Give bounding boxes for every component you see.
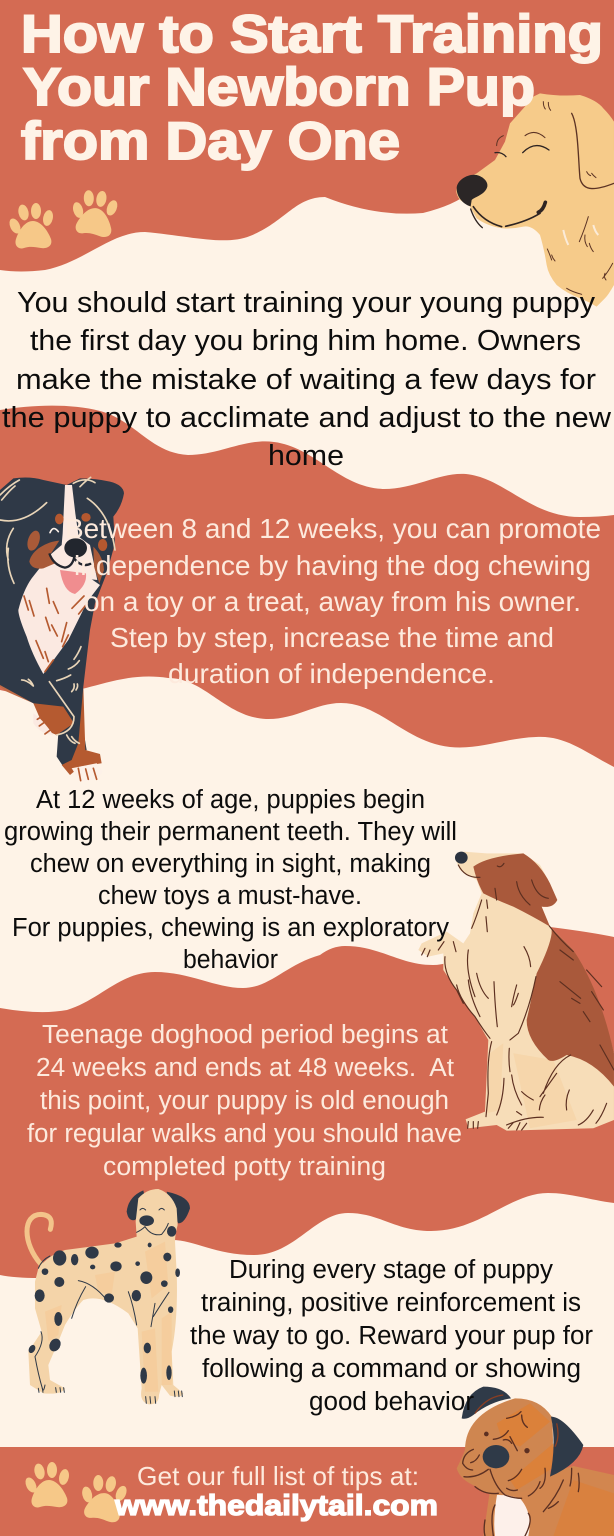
text block: 12 weeks: chew on everything in sight, making [30, 850, 431, 878]
text block: teenage doghood: for regular walks and you should have [27, 1120, 462, 1148]
panel: third wave band [0, 927, 614, 1278]
text block: 12 weeks [4, 786, 457, 974]
text block: teenage doghood: 24 weeks and ends at 48 weeks. At [36, 1054, 454, 1082]
heading: title: from Day One [21, 112, 400, 171]
text block: teenage doghood: Teenage doghood period begins at [42, 1021, 448, 1049]
text block: teenage doghood: this point, your puppy is old enough [40, 1087, 449, 1115]
text block: positive reinforcement: good behavior [309, 1388, 475, 1416]
text block: positive reinforcement: following a command or showing [202, 1355, 581, 1383]
illustration: golden retriever [456, 93, 614, 307]
text block: positive reinforcement: During every stage of puppy [229, 1256, 553, 1284]
text block: intro: the first day you bring him home. Owners [30, 325, 581, 357]
icon: paw print top left [7, 203, 54, 248]
text block: 12 weeks: For puppies, chewing is an exploratory [12, 914, 449, 942]
text block: 8 to 12 weeks [65, 513, 601, 689]
footer text: website: www.thedailytail.com [114, 1490, 438, 1522]
text block: intro: make the mistake of waiting a few days for [16, 364, 596, 396]
illustration: boxer puppy [457, 1387, 614, 1536]
text block: 8 to 12 weeks: independence by having the dog chewing [74, 550, 591, 581]
text block: 8 to 12 weeks: duration of independence. [168, 658, 495, 689]
illustration: collie dog [418, 852, 614, 1131]
illustration: dalmatian dog [27, 1189, 190, 1404]
text block: 8 to 12 weeks: Step by step, increase the time and [110, 622, 554, 653]
text block: 12 weeks: At 12 weeks of age, puppies begin [36, 786, 425, 814]
text block: intro: home [268, 440, 344, 472]
text block: intro [2, 287, 612, 472]
text block: 12 weeks: behavior [183, 946, 278, 974]
text block: 8 to 12 weeks: on a toy or a treat, away from his owner. [84, 586, 581, 617]
icon: paw print footer left [23, 1462, 70, 1507]
footer text: call to action: Get our full list of tips at: [137, 1461, 419, 1491]
panel: footer band [0, 1447, 614, 1536]
text block: intro: You should start training your young puppy [17, 287, 596, 319]
icon: paw print top right [67, 186, 121, 239]
text block: 12 weeks: growing their permanent teeth. They will [4, 818, 457, 846]
icon: paw print footer right [75, 1470, 130, 1525]
text block: positive reinforcement: training, positive reinforcement is [201, 1289, 581, 1317]
illustration: bernese mountain dog [0, 477, 124, 782]
panel: header wave [0, 0, 614, 272]
panel: second wave band [0, 406, 614, 767]
text block: 8 to 12 weeks: Between 8 and 12 weeks, you can promote [65, 513, 601, 544]
text block: positive reinforcement: the way to go. Reward your pup for [190, 1322, 594, 1350]
heading: title: How to Start Training [21, 5, 603, 64]
text block: intro: the puppy to acclimate and adjust to the new [2, 402, 612, 434]
text block: teenage doghood [27, 1021, 462, 1181]
text block: positive reinforcement [190, 1256, 594, 1416]
text block: 12 weeks: chew toys a must-have. [98, 882, 362, 910]
text block: teenage doghood: completed potty training [103, 1153, 386, 1181]
heading: title [21, 5, 603, 171]
heading: title: Your Newborn Pup [23, 58, 535, 117]
